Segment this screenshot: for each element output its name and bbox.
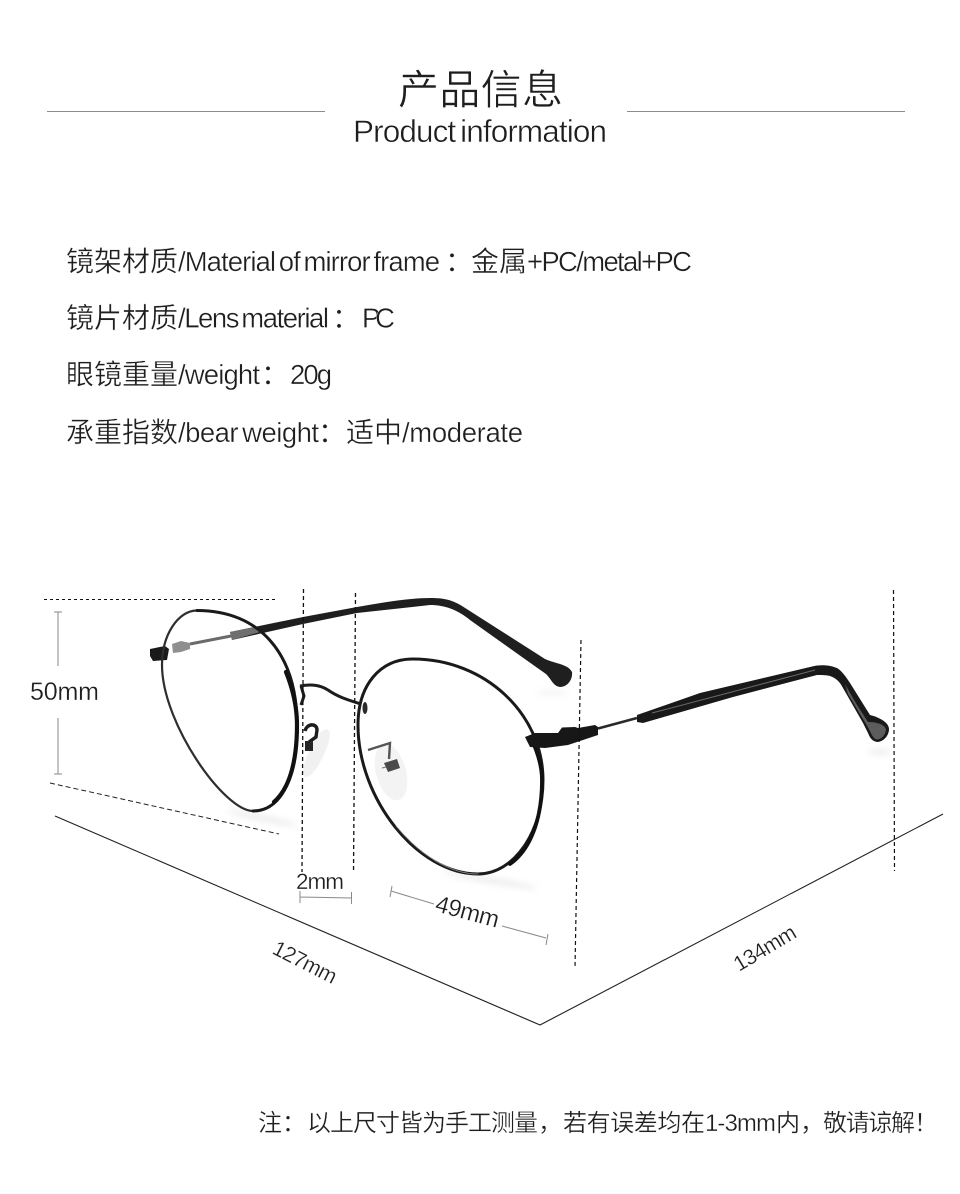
spec: load bearing: /bear weight (178, 417, 319, 448)
spec: load bearing: 承重指数 (66, 417, 178, 448)
spec: load bearing (66, 417, 523, 448)
spec: weight (66, 359, 332, 390)
dimension: 127mm front width: 127mm (269, 936, 341, 989)
spec: weight: ： (261, 359, 289, 390)
footnote: 敬请谅解 (823, 1110, 915, 1137)
guide lines: measurement extents (44, 589, 943, 1025)
spec: lens material: PC (362, 302, 395, 334)
spec: load bearing: 适中 (346, 417, 402, 448)
near temple arm (598, 718, 637, 728)
footnote: ， (538, 1110, 562, 1137)
far temple arm (230, 598, 572, 687)
dimension: 2mm bridge: 2mm (296, 869, 344, 894)
glasses photo illustration (150, 598, 892, 891)
shadows (226, 692, 892, 891)
right nose pad (368, 740, 413, 804)
spec: lens material: 镜片材质 (66, 302, 178, 334)
footnote (258, 1110, 938, 1137)
footnote: 1-3mm (705, 1110, 776, 1137)
spec: frame material (66, 246, 692, 277)
right lens rim (358, 659, 543, 874)
dimension: 49mm lens width (390, 886, 548, 945)
spec: load bearing: /moderate (402, 417, 523, 448)
dimension: 50mm height: 50mm (30, 678, 99, 706)
spec: lens material: ： (332, 302, 360, 334)
near hinge (525, 725, 598, 748)
spec: frame material: +PC/metal+PC (527, 246, 692, 277)
spec: frame material: ： (445, 246, 473, 277)
dimension: 50mm height (30, 612, 99, 774)
spec: lens material: /Lens material (178, 302, 329, 334)
footnote: 内， (776, 1110, 824, 1137)
heading: product information: Product information (353, 113, 607, 149)
spec: lens material (66, 302, 395, 334)
left nose pad (303, 725, 330, 777)
footnote: ！ (914, 1110, 938, 1137)
heading: product information: 产品信息 (398, 67, 563, 113)
dimension: 134mm temple length: 134mm (729, 920, 801, 976)
heading: product information (47, 67, 905, 149)
dimension: 2mm bridge (296, 869, 352, 904)
dimension: 49mm lens width: 49mm (432, 891, 502, 934)
footnote: 若有误差均在 (563, 1110, 705, 1137)
spec: weight: /weight (178, 359, 260, 390)
spec: load bearing: ： (318, 417, 346, 448)
spec: weight: 20g (290, 359, 332, 390)
bridge (300, 685, 361, 704)
text block: product specifications (66, 246, 692, 448)
footnote: 以上尺寸皆为手工测量 (307, 1110, 538, 1137)
footnote: 注： (258, 1110, 306, 1137)
spec: weight: 眼镜重量 (66, 359, 178, 390)
spec: frame material: /Material of mirror frame (178, 246, 440, 277)
left lens rim (162, 610, 297, 811)
spec: frame material: 镜架材质 (66, 246, 178, 277)
far hinge (150, 646, 169, 661)
spec: frame material: 金属 (471, 246, 527, 277)
